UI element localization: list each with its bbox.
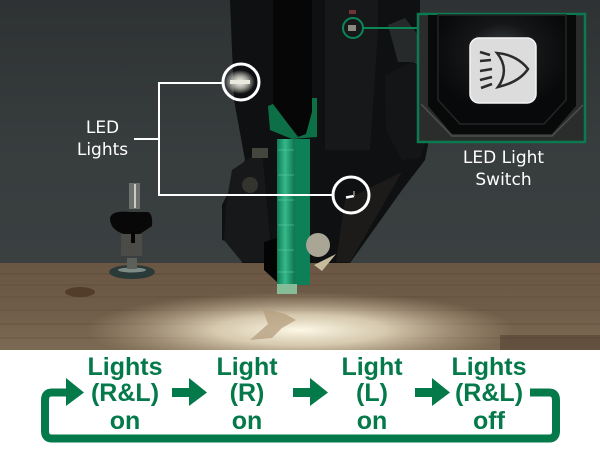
panel: LED light switch inset [418,14,585,142]
step: left on: Light [341,353,403,381]
arrow [172,378,207,406]
saw body [222,0,432,263]
plate [306,233,330,257]
step: left on: (L) [356,379,388,407]
switch label: Switch [475,170,532,190]
step: lights off: Lights [452,353,526,381]
arrow [415,378,450,406]
step: lights on: (R&L) [91,379,159,407]
step: lights on: Lights [88,353,162,381]
switch locator [343,10,418,38]
step: lights off: (R&L) [455,379,523,407]
motor handle [273,0,312,137]
LED lights connector lines [134,83,333,195]
LED lights label: Lights [77,140,128,160]
step: right on: on [232,407,262,435]
panel: cycle sequence [0,350,600,450]
LED light upper highlight [223,64,259,100]
icon: transparent green blade guard [277,139,295,293]
icon: headlight switch button [470,38,536,103]
step: right on: (R) [230,379,264,407]
clamp knob [109,183,155,279]
arrow [293,378,328,406]
loop arrow [45,378,556,438]
green guard [268,98,317,139]
LED lights label: LED [86,118,119,138]
LED light lower highlight [333,177,369,213]
step: lights off: off [473,407,506,435]
step: right on: Light [216,353,278,381]
step: lights on: on [110,407,140,435]
step: left on: on [357,407,387,435]
switch label: LED Light [463,148,544,168]
